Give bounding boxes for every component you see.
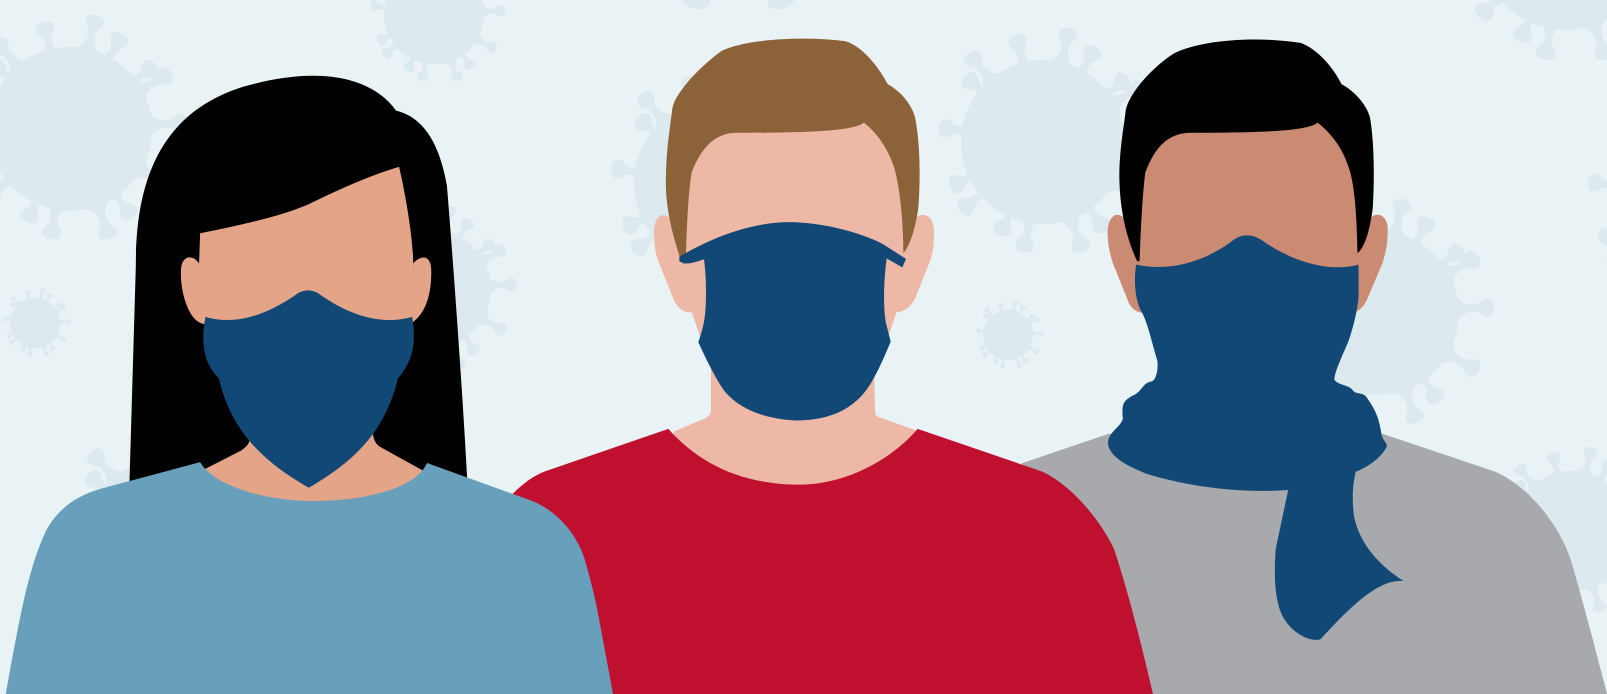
icon: virus top right bbox=[1454, 0, 1607, 63]
navy scarf bbox=[1108, 235, 1404, 640]
person: right man with scarf bbox=[1022, 39, 1607, 694]
icon: virus top bbox=[369, 0, 505, 83]
icon: virus lower left bbox=[60, 424, 283, 653]
face bbox=[1135, 115, 1359, 274]
neck bbox=[205, 398, 425, 507]
ear right bbox=[411, 258, 431, 323]
icon: virus behind centre man bbox=[610, 67, 833, 296]
icon: small virus left bbox=[3, 288, 71, 358]
icon: virus behind right man bbox=[1271, 197, 1494, 426]
icon: small virus centre bbox=[976, 300, 1044, 370]
icon: virus top centre bbox=[564, 0, 901, 14]
navy mask bbox=[679, 222, 906, 420]
icon: virus right edge bbox=[1587, 83, 1607, 307]
navy mask bbox=[203, 290, 414, 488]
ear left bbox=[1108, 215, 1142, 313]
blue shirt bbox=[6, 462, 613, 694]
ear right bbox=[893, 215, 934, 312]
icon: virus lower right bbox=[1495, 446, 1607, 614]
neck bbox=[663, 367, 923, 491]
ear left bbox=[654, 215, 693, 312]
icon: large virus centre bbox=[937, 26, 1160, 255]
brown hair bbox=[666, 39, 920, 258]
icon: virus top left bbox=[0, 13, 187, 242]
face bbox=[199, 167, 413, 328]
person: centre man with mask bbox=[483, 39, 1153, 694]
black hair bbox=[1119, 39, 1374, 261]
person: woman with mask bbox=[6, 76, 613, 694]
face bbox=[685, 115, 904, 336]
red shirt bbox=[483, 429, 1153, 694]
icon: virus behind woman bbox=[354, 204, 517, 372]
ear right bbox=[1356, 215, 1388, 312]
grey shirt bbox=[1022, 434, 1607, 694]
long black hair bbox=[129, 76, 468, 487]
ear left bbox=[181, 257, 207, 324]
